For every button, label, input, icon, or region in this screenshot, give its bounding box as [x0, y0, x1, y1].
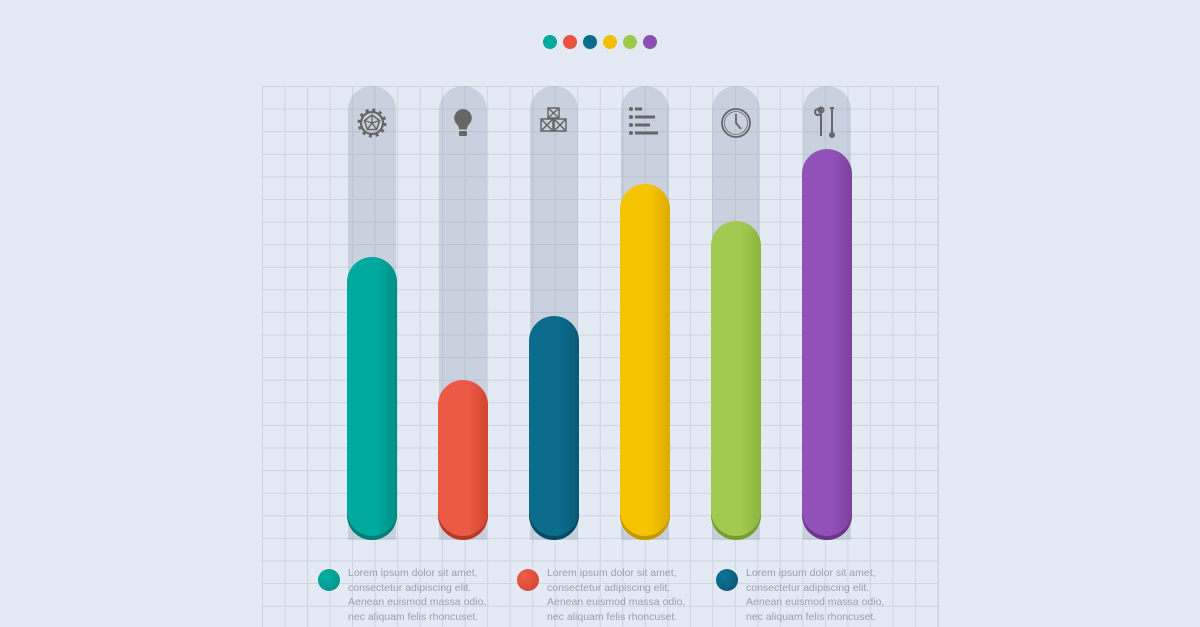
- legend 2: [517, 567, 685, 622]
- bar green: [711, 221, 761, 540]
- legend 1: Aenean euismod massa odio,: [348, 596, 486, 608]
- track 6: [803, 86, 851, 540]
- legend 3: Lorem ipsum dolor sit amet,: [746, 567, 876, 579]
- legend 1: nec aliquam felis rhoncuset.: [348, 610, 478, 622]
- icon: list: [629, 107, 658, 135]
- legend 3: consectetur adipiscing elit.: [746, 582, 869, 594]
- track 3: [530, 86, 578, 540]
- color dots: [543, 35, 657, 49]
- chart: [347, 86, 852, 540]
- bar red: [438, 380, 488, 540]
- icon: bulb: [454, 109, 472, 136]
- bar yellow: [620, 184, 670, 540]
- grid background: [262, 86, 939, 627]
- legend 2: consectetur adipiscing elit.: [547, 582, 670, 594]
- track 1: [348, 86, 396, 540]
- legend 2: Aenean euismod massa odio,: [547, 596, 685, 608]
- legend 2: nec aliquam felis rhoncuset.: [547, 610, 677, 622]
- track 2: [439, 86, 487, 540]
- track 5: [712, 86, 760, 540]
- track 4: [621, 86, 669, 540]
- icon: tools: [814, 106, 835, 138]
- legend 3: nec aliquam felis rhoncuset.: [746, 610, 876, 622]
- icon: clock: [721, 108, 751, 138]
- bar purple: [802, 149, 852, 540]
- bar blue: [529, 316, 579, 540]
- icon: gear: [358, 108, 386, 138]
- legend 3: Aenean euismod massa odio,: [746, 596, 884, 608]
- icon: boxes: [540, 107, 567, 132]
- legend 1: Lorem ipsum dolor sit amet,: [348, 567, 478, 579]
- legend 1: consectetur adipiscing elit.: [348, 582, 471, 594]
- legend 2: Lorem ipsum dolor sit amet,: [547, 567, 677, 579]
- legend 3: [716, 567, 884, 622]
- bar teal: [347, 257, 397, 540]
- legend 1: [318, 567, 486, 622]
